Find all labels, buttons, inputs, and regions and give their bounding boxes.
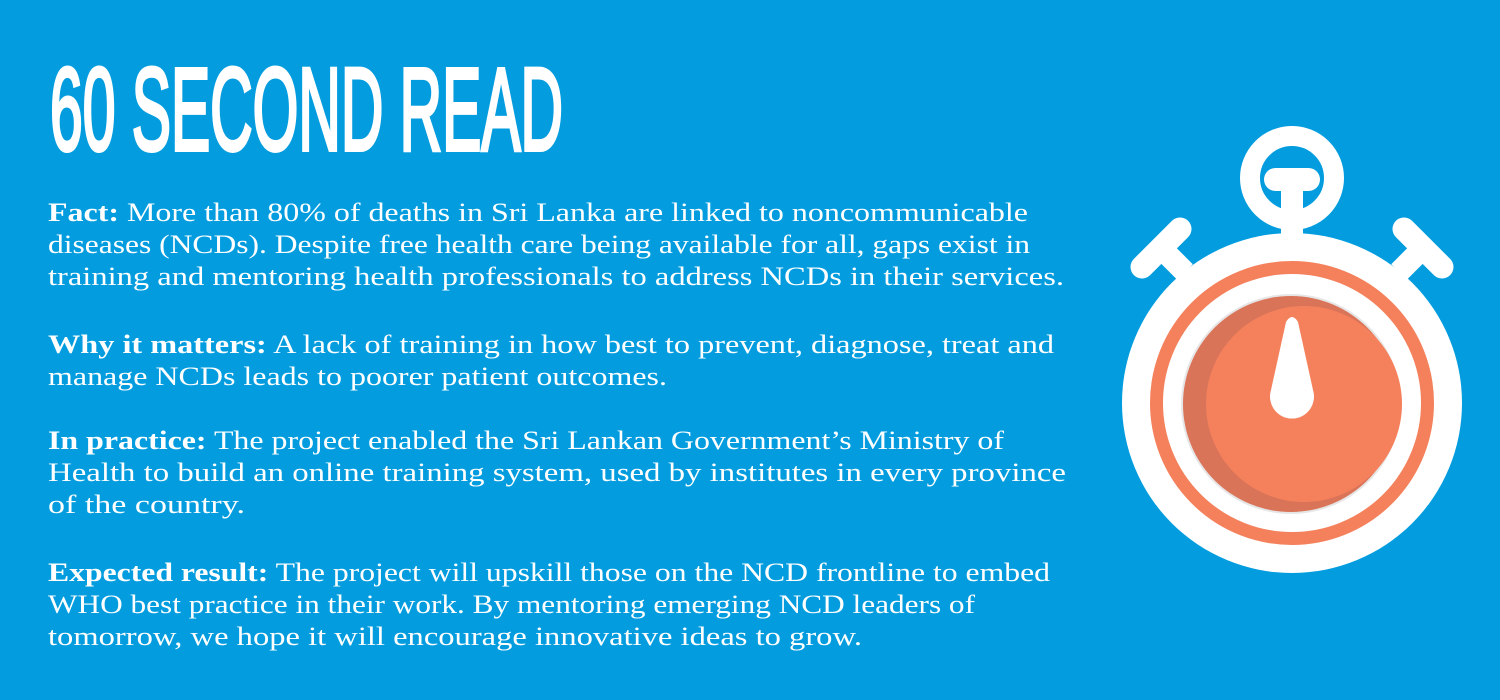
text block: why it matters: Why it matters: A lack of training in how best to prevent, diagnose, treat and [48,330,1054,359]
text block: in practice: of the country. [48,490,245,519]
text block: in practice: In practice: The project enabled the Sri Lankan Government’s Ministry of [48,426,1004,455]
text block: in practice [48,426,1066,519]
hand [1270,317,1314,419]
text block: why it matters: manage NCDs leads to poorer patient outcomes. [48,362,667,391]
text block: fact: training and mentoring health professionals to address NCDs in their services. [48,262,1064,291]
text block: expected result: tomorrow, we hope it will encourage innovative ideas to grow. [48,622,862,651]
text block: fact: diseases (NCDs). Despite free health care being available for all, gaps exist in [48,230,1030,259]
text block: expected result [48,558,1050,651]
text block: expected result: Expected result: The project will upskill those on the NCD frontline to embed [48,558,1050,587]
text: 60 SECOND READ [50,44,563,176]
text block: fact: Fact: More than 80% of deaths in Sri Lanka are linked to noncommunicable [48,198,1028,227]
text block: expected result: WHO best practice in their work. By mentoring emerging NCD leaders of [48,590,975,619]
crown stem [1281,185,1303,240]
dial [1181,294,1401,514]
icon: stopwatch [1122,136,1462,573]
text block: fact [48,198,1064,291]
body [1122,233,1462,573]
side buttons [1161,248,1185,272]
top ring [1250,136,1334,220]
text block: why it matters [48,330,1054,391]
text block: in practice: Health to build an online training system, used by institutes in every province [48,458,1066,487]
